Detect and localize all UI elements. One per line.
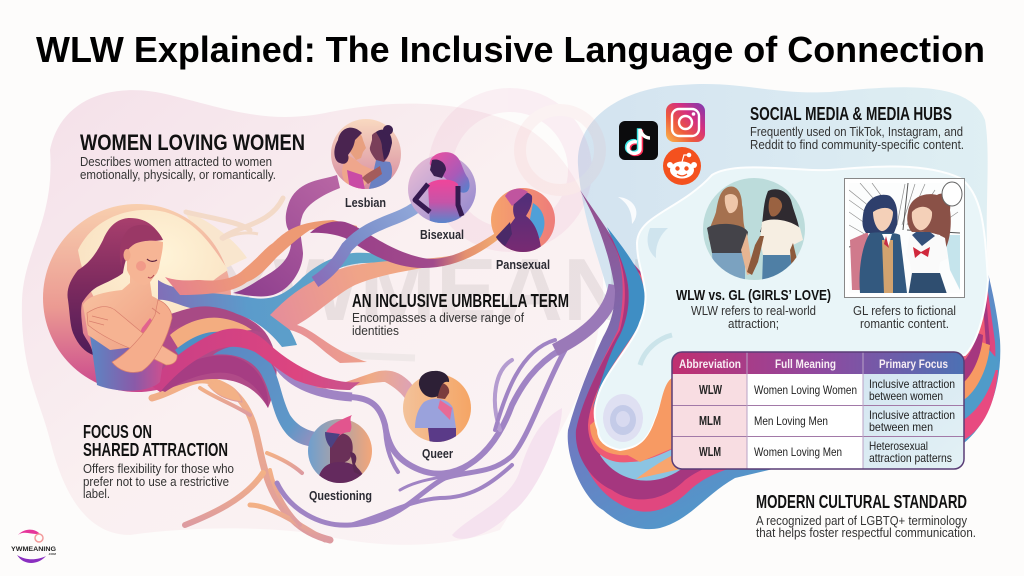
text block: focus on shared attraction: FOCUS ON (83, 422, 152, 442)
icon: reddit (663, 147, 701, 185)
table header: Abbreviation (679, 357, 741, 371)
text block: focus on shared attraction (83, 422, 234, 501)
logo: ywmeaning: .COM (48, 552, 56, 556)
text block: women loving women: Describes women attracted to women (80, 154, 272, 169)
table rows: between men (869, 420, 933, 434)
ribbon: lilac branch (277, 363, 352, 397)
ribbon: to lesbian (233, 175, 340, 296)
icon: pansexual circle (491, 188, 555, 255)
table rows: Inclusive attraction (869, 377, 955, 391)
text block: focus on shared attraction: prefer not to use a restrictive (83, 474, 229, 489)
table rows: Inclusive attraction (869, 408, 955, 422)
text block: an inclusive umbrella term: AN INCLUSIVE UMBRELLA TERM (352, 291, 569, 311)
teardrop rings (603, 394, 643, 442)
table rows: Women Loving Women (754, 383, 857, 397)
text block: wlw vs gl: WLW vs. GL (GIRLS’ LOVE) (676, 287, 831, 304)
finger lines (89, 308, 160, 325)
dress (90, 328, 165, 391)
table: comparison (672, 352, 964, 469)
text block: modern cultural standard: that helps foster respectful communication. (756, 526, 976, 540)
table rows: MLM (699, 413, 721, 428)
inner pale panel (595, 166, 988, 479)
icon: tiktok (619, 121, 658, 160)
panel: left pink blob (22, 90, 603, 545)
ribbon: lower orange (270, 255, 455, 363)
text block: wlw vs gl (676, 287, 956, 331)
label: questioning: Questioning (309, 489, 372, 503)
torso skin (83, 272, 170, 350)
table rows: WLW (699, 382, 723, 397)
text block: wlw vs gl: WLW refers to real-world (691, 304, 816, 318)
icon: lesbian circle (331, 119, 401, 192)
text block: social media and media hubs (750, 104, 964, 152)
text block: focus on shared attraction: Offers flexibility for those who (83, 461, 234, 476)
text block: wlw vs gl: GL refers to fictional (853, 304, 956, 318)
text block: social media and media hubs: Frequently used on TikTok, Instagram, and (750, 125, 963, 139)
table rows: Heterosexual (869, 439, 928, 453)
icon: bisexual circle (408, 152, 476, 225)
lilac ribbons (277, 340, 565, 525)
peach tree roots (152, 380, 330, 540)
logo: ywmeaning (11, 530, 56, 563)
ribbon: blue lower left (175, 332, 232, 360)
ribbon: magenta to pansexual (310, 221, 500, 268)
label: pansexual: Pansexual (496, 258, 550, 272)
ribbon: peach upper (165, 220, 357, 295)
text block: focus on shared attraction: label. (83, 486, 110, 501)
ribbon: orange lower left (170, 318, 252, 348)
ear, blush and eye (124, 249, 157, 278)
label: queer: Queer (422, 447, 453, 461)
text block: focus on shared attraction: SHARED ATTRACTION (83, 440, 228, 460)
text block: an inclusive umbrella term: Encompasses a diverse range of (352, 311, 524, 325)
right side ribbon swirl (568, 190, 1000, 529)
icon: questioning circle (308, 415, 372, 490)
logo: ywmeaning: YWMEANING (11, 547, 56, 553)
text block: women loving women (80, 130, 305, 182)
icon: crescent swirl (618, 197, 636, 224)
table rows: attraction patterns (869, 451, 952, 465)
text block: social media and media hubs: Reddit to find community-specific content. (750, 138, 964, 152)
label: lesbian: Lesbian (345, 196, 386, 210)
table rows: Men Loving Men (754, 414, 828, 428)
text block: modern cultural standard: A recognized part of LGBTQ+ terminology (756, 514, 968, 528)
icon: instagram (666, 103, 705, 142)
neckline (135, 318, 160, 345)
text block: women loving women: WOMEN LOVING WOMEN (80, 130, 305, 155)
illustration: wlw couple (703, 178, 805, 285)
arm: crossing forearm (112, 300, 172, 372)
table rows: WLM (699, 444, 721, 459)
ribbon: to bisexual (315, 208, 415, 282)
table rows (699, 377, 955, 465)
ribbon: mauve (165, 306, 262, 332)
illustration: manga panel (844, 178, 964, 298)
arm: forearm to shoulder (87, 307, 177, 365)
text block: social media and media hubs: SOCIAL MEDIA & MEDIA HUBS (750, 104, 952, 124)
label: bisexual: Bisexual (420, 228, 464, 242)
title: WLW Explained: The Inclusive Language of Connection (36, 29, 985, 70)
ribbon: lilac thick right (555, 285, 615, 350)
woman halo (43, 204, 231, 392)
table header: Primary Focus (879, 357, 948, 371)
table header (679, 357, 948, 371)
ribbon: magenta main (150, 328, 360, 392)
ribbon backing mass (160, 308, 277, 408)
orange drop (622, 377, 673, 462)
face (127, 241, 163, 285)
ribbon: peach to queer (313, 370, 420, 415)
watermark (212, 100, 804, 370)
text block: women loving women: emotionally, physically, or romantically. (80, 167, 276, 182)
decorative pale shapes (183, 198, 562, 539)
woman figure (67, 218, 177, 391)
text block: modern cultural standard (756, 492, 976, 540)
table rows: Women Loving Men (754, 445, 842, 459)
table header: Full Meaning (775, 357, 836, 371)
table rows: between women (869, 389, 943, 403)
text block: an inclusive umbrella term (352, 291, 569, 338)
icon: queer circle (403, 371, 471, 445)
ribbon: blue to questioning (213, 346, 327, 447)
ribbon: dark magenta lower (150, 356, 268, 408)
hairline (120, 225, 163, 273)
watermark: COM (712, 329, 804, 370)
hair (67, 218, 163, 355)
text block: wlw vs gl: romantic content. (860, 317, 949, 331)
panel: right blue blob (578, 84, 990, 460)
text block: wlw vs gl: attraction; (728, 317, 779, 331)
ribbon: teal blue (158, 253, 400, 347)
watermark: YWMEANING (212, 240, 792, 339)
text block: an inclusive umbrella term: identities (352, 324, 399, 338)
